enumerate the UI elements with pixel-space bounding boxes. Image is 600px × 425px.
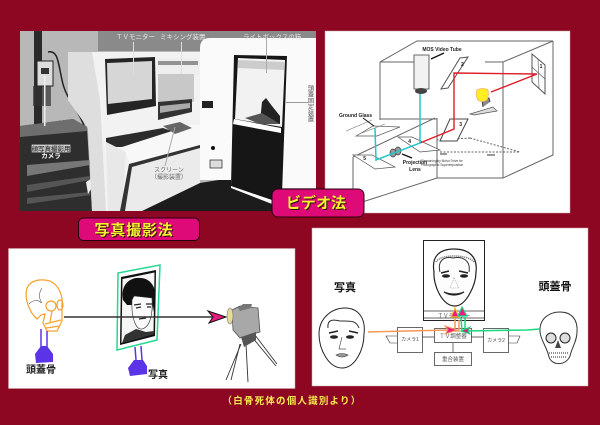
control cabinet xyxy=(68,42,222,211)
panel: video method diagram xyxy=(325,31,570,213)
label: video method xyxy=(272,189,364,217)
camera 1 box xyxy=(386,328,422,352)
arrow xyxy=(64,311,226,323)
projection lens xyxy=(390,147,427,173)
source caption: （白骨死体の個人識別より） xyxy=(223,395,361,407)
console desk xyxy=(106,122,222,211)
screen label xyxy=(151,127,187,181)
right white enclosure xyxy=(200,38,316,204)
mirror 3 xyxy=(440,119,468,141)
cabinet outline xyxy=(353,41,553,205)
MOS video tube: MOS Video Tube xyxy=(422,47,462,53)
camera label: カメラ xyxy=(41,152,61,160)
camera label: 顔写真撮影用 xyxy=(32,144,70,153)
camera label xyxy=(32,144,70,160)
TV control box xyxy=(434,328,472,342)
label: photographic method: 写真撮影法 xyxy=(94,221,174,239)
ground glass: Ground Glass xyxy=(339,113,372,119)
MOS video tube xyxy=(414,47,462,94)
caption: Remaining by Motor Drive for xyxy=(421,159,464,163)
camera stand with label xyxy=(33,31,85,131)
camera 2 box: カメラ2 xyxy=(487,338,505,344)
skull holder caption: 頭蓋固定装置 xyxy=(306,85,314,123)
TV monitor xyxy=(105,42,156,115)
floor xyxy=(142,178,316,211)
label: video method: ビデオ法 xyxy=(286,194,346,212)
superimposer box xyxy=(422,337,484,366)
skull outline xyxy=(26,280,63,331)
cyan beam xyxy=(375,94,420,160)
screen label: スクリーン xyxy=(154,167,184,174)
projection lens: Projection xyxy=(403,160,427,166)
projection lens: Lens xyxy=(409,167,421,173)
mirror 1: 1 xyxy=(540,64,543,70)
skull stand xyxy=(26,329,56,376)
photo stand xyxy=(128,346,168,381)
TV monitor with face: ＴＶモニター xyxy=(437,312,471,320)
red beam xyxy=(420,73,537,143)
superimposer box: 重合装置 xyxy=(442,355,464,363)
photo captions xyxy=(116,32,302,41)
panel: TV superimposition diagram xyxy=(312,228,588,386)
orange beam xyxy=(368,308,459,334)
TV monitor with face xyxy=(424,240,484,320)
yellow skull on stand xyxy=(470,88,497,115)
camera 2 box xyxy=(484,328,520,352)
panel: equipment photograph xyxy=(20,31,316,211)
TV control box: ＴＶ調整器 xyxy=(439,332,467,340)
skull stand: 頭蓋骨 xyxy=(26,364,56,376)
photo label: 写真 xyxy=(334,280,356,294)
caption: Photographic Superimposition xyxy=(421,163,463,167)
label: photographic method xyxy=(78,218,200,240)
mirror 4 and 5: 5 xyxy=(363,156,366,162)
mirror 4 and 5 xyxy=(353,137,440,169)
photo captions: ＴＶモニター xyxy=(116,32,155,41)
mirror 2 xyxy=(441,57,468,89)
green beam xyxy=(458,307,540,334)
control panel xyxy=(157,42,199,120)
panel: photographic method diagram xyxy=(8,248,295,388)
skull drawing xyxy=(540,312,577,364)
portrait photo on frame xyxy=(117,265,160,350)
shelf rack xyxy=(20,76,96,211)
photo stand: 写真 xyxy=(148,368,168,381)
photo captions: ライトボックスの箱 xyxy=(243,32,302,41)
camera on tripod xyxy=(226,304,277,382)
photo captions: ミキシング装置 xyxy=(160,32,206,41)
mirror 3: 3 xyxy=(459,122,462,128)
screen label: （撮影装置） xyxy=(151,173,187,181)
photo face xyxy=(319,308,364,368)
mirror 2: 2 xyxy=(461,62,464,68)
skull label: 頭蓋骨 xyxy=(538,280,572,293)
camera 1 box: カメラ1 xyxy=(401,337,419,343)
mirror 1 xyxy=(532,54,545,94)
caption xyxy=(421,154,495,167)
mirror 4 and 5: 4 xyxy=(408,139,411,145)
ground glass xyxy=(339,113,400,136)
